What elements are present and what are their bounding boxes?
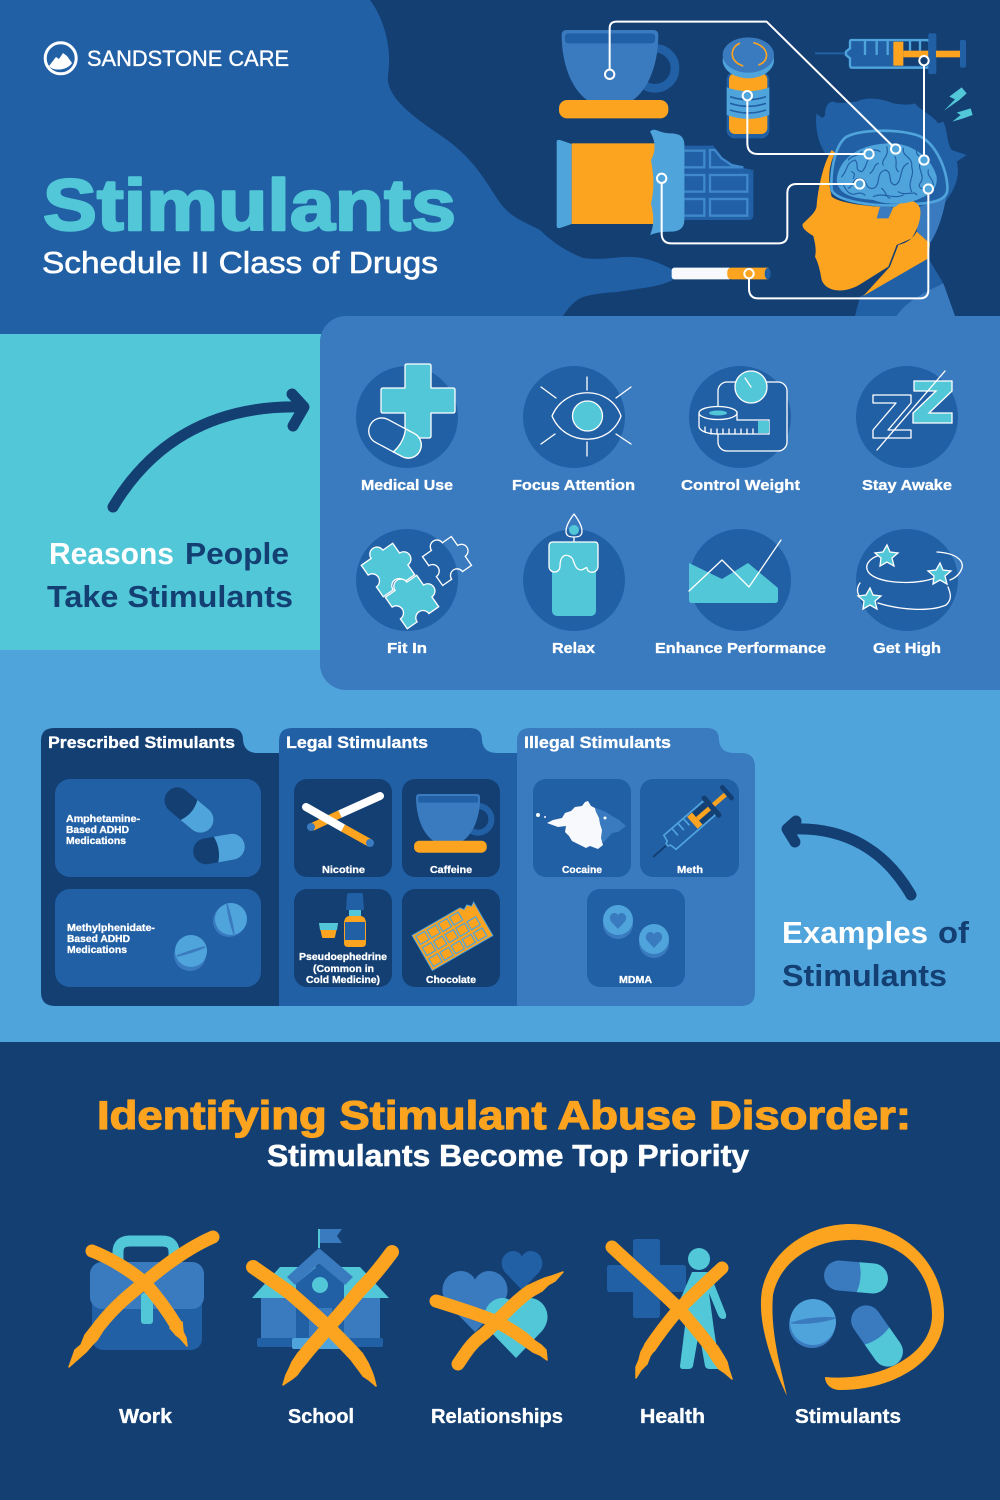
label: Relax <box>552 640 596 657</box>
card: nicotine <box>294 779 392 877</box>
card: caffeine: Caffeine <box>430 864 472 876</box>
label: Focus Attention <box>512 477 635 494</box>
panel: reasons grid <box>320 316 1000 690</box>
heading: Reasons People Take Stimulants: Take Stimulants <box>47 579 293 614</box>
icon: pill bottle <box>723 37 774 138</box>
label: Control Weight <box>681 477 800 494</box>
heading: Reasons People Take Stimulants: Reasons <box>49 536 174 571</box>
background: light blue section <box>0 650 1000 1042</box>
icon: cigarette <box>672 268 771 279</box>
card: cocaine <box>533 779 631 877</box>
background: navy bottom section <box>0 1042 1000 1500</box>
card: pseudoephedrine: (Common in <box>313 963 374 975</box>
card: amphetamine: Amphetamine- <box>66 813 140 825</box>
heading: Examples of Stimulants: Stimulants <box>782 958 947 993</box>
heading: Reasons People Take Stimulants: People <box>185 536 289 571</box>
panel: prescribed stimulants folder <box>41 728 279 1006</box>
reason: Fit In <box>356 527 477 631</box>
card: chocolate <box>402 889 500 987</box>
card: methylphenidate: Based ADHD <box>67 933 130 945</box>
icon: lightning bolts <box>944 87 973 122</box>
logo: Sandstone Care <box>45 43 289 74</box>
card: pseudoephedrine: Cold Medicine) <box>306 974 380 986</box>
card: methylphenidate: Medications <box>67 944 127 956</box>
card: MDMA <box>587 889 685 987</box>
icon: crossed-out hearts <box>436 1251 563 1364</box>
card: chocolate: Chocolate <box>426 974 476 986</box>
heading: Examples of Stimulants: of <box>938 915 970 950</box>
icon: crossed-out briefcase <box>69 1237 213 1367</box>
reason: Control Weight <box>689 366 791 468</box>
card: pseudoephedrine: Pseudoephedrine <box>299 951 387 963</box>
icon: brain <box>837 143 937 204</box>
arrow: examples <box>787 821 911 895</box>
icon: circled stimulants <box>761 1224 944 1396</box>
icon: chocolate bar <box>557 130 753 235</box>
card: nicotine: Nicotine <box>322 864 365 876</box>
icon: crossed-out health <box>607 1239 732 1379</box>
label: Stay Awake <box>862 477 952 494</box>
card: amphetamine: Based ADHD <box>66 824 129 836</box>
icon: syringe <box>815 33 966 74</box>
label: Health: Health <box>640 1406 705 1428</box>
card: amphetamine: Medications <box>66 835 126 847</box>
icon: coffee cup <box>559 30 675 118</box>
heading: Identifying Stimulant Abuse Disorder: Identifying Stimulant Abuse Disorder: <box>97 1094 911 1138</box>
card: methylphenidate <box>55 889 261 987</box>
card: methylphenidate: Methylphenidate- <box>67 922 156 934</box>
card: cocaine: Cocaine <box>562 864 602 876</box>
arrow: reasons <box>113 394 304 507</box>
heading: Reasons People Take Stimulants <box>47 536 293 614</box>
card: caffeine <box>402 779 500 877</box>
panel: illegal stimulants folder <box>517 728 755 1006</box>
background: teal reasons block <box>0 334 330 650</box>
background: header navy <box>0 0 1000 334</box>
logo wordmark: SANDSTONE CARE <box>87 46 289 71</box>
subheading: Stimulants Become Top Priority <box>267 1138 750 1173</box>
circuit nodes <box>605 56 933 278</box>
title: Stimulants <box>43 166 456 246</box>
hero illustration: substances wired to the brain <box>557 22 973 316</box>
label: Stimulants: Stimulants <box>795 1406 901 1428</box>
subtitle: Schedule II Class of Drugs <box>42 245 438 280</box>
card: meth: Meth <box>677 864 703 876</box>
reason: Get High <box>856 529 962 631</box>
reason: Relax <box>523 514 625 631</box>
label: Relationships: Relationships <box>431 1406 563 1428</box>
label: Medical Use <box>361 477 453 494</box>
reason: Focus Attention <box>523 366 631 468</box>
reason: Medical Use <box>356 364 458 468</box>
reason: Stay Awake <box>856 366 958 468</box>
label: Fit In <box>387 640 427 657</box>
icon: head with exposed brain <box>803 99 967 316</box>
background: header blue wave <box>0 0 1000 334</box>
panel: legal stimulants folder <box>279 728 517 1006</box>
heading: Examples of Stimulants: Examples <box>782 915 928 950</box>
circuit lines <box>610 22 928 298</box>
label: Enhance Performance <box>655 640 826 657</box>
label: Work: Work <box>119 1406 173 1428</box>
folder title: Prescribed Stimulants <box>48 733 235 752</box>
label: School: School <box>288 1406 354 1428</box>
icon: crossed-out school <box>252 1229 392 1386</box>
folder title: Illegal Stimulants <box>524 733 671 752</box>
card: meth <box>640 779 739 877</box>
folder title: Legal Stimulants <box>286 733 428 752</box>
card: pseudoephedrine <box>294 889 392 987</box>
card: amphetamine <box>55 779 261 877</box>
reason: Enhance Performance <box>689 529 791 631</box>
card: MDMA: MDMA <box>619 974 652 986</box>
heading: Examples of Stimulants <box>782 915 970 993</box>
label: Get High <box>873 640 941 657</box>
icon: mountain logo <box>45 43 76 74</box>
